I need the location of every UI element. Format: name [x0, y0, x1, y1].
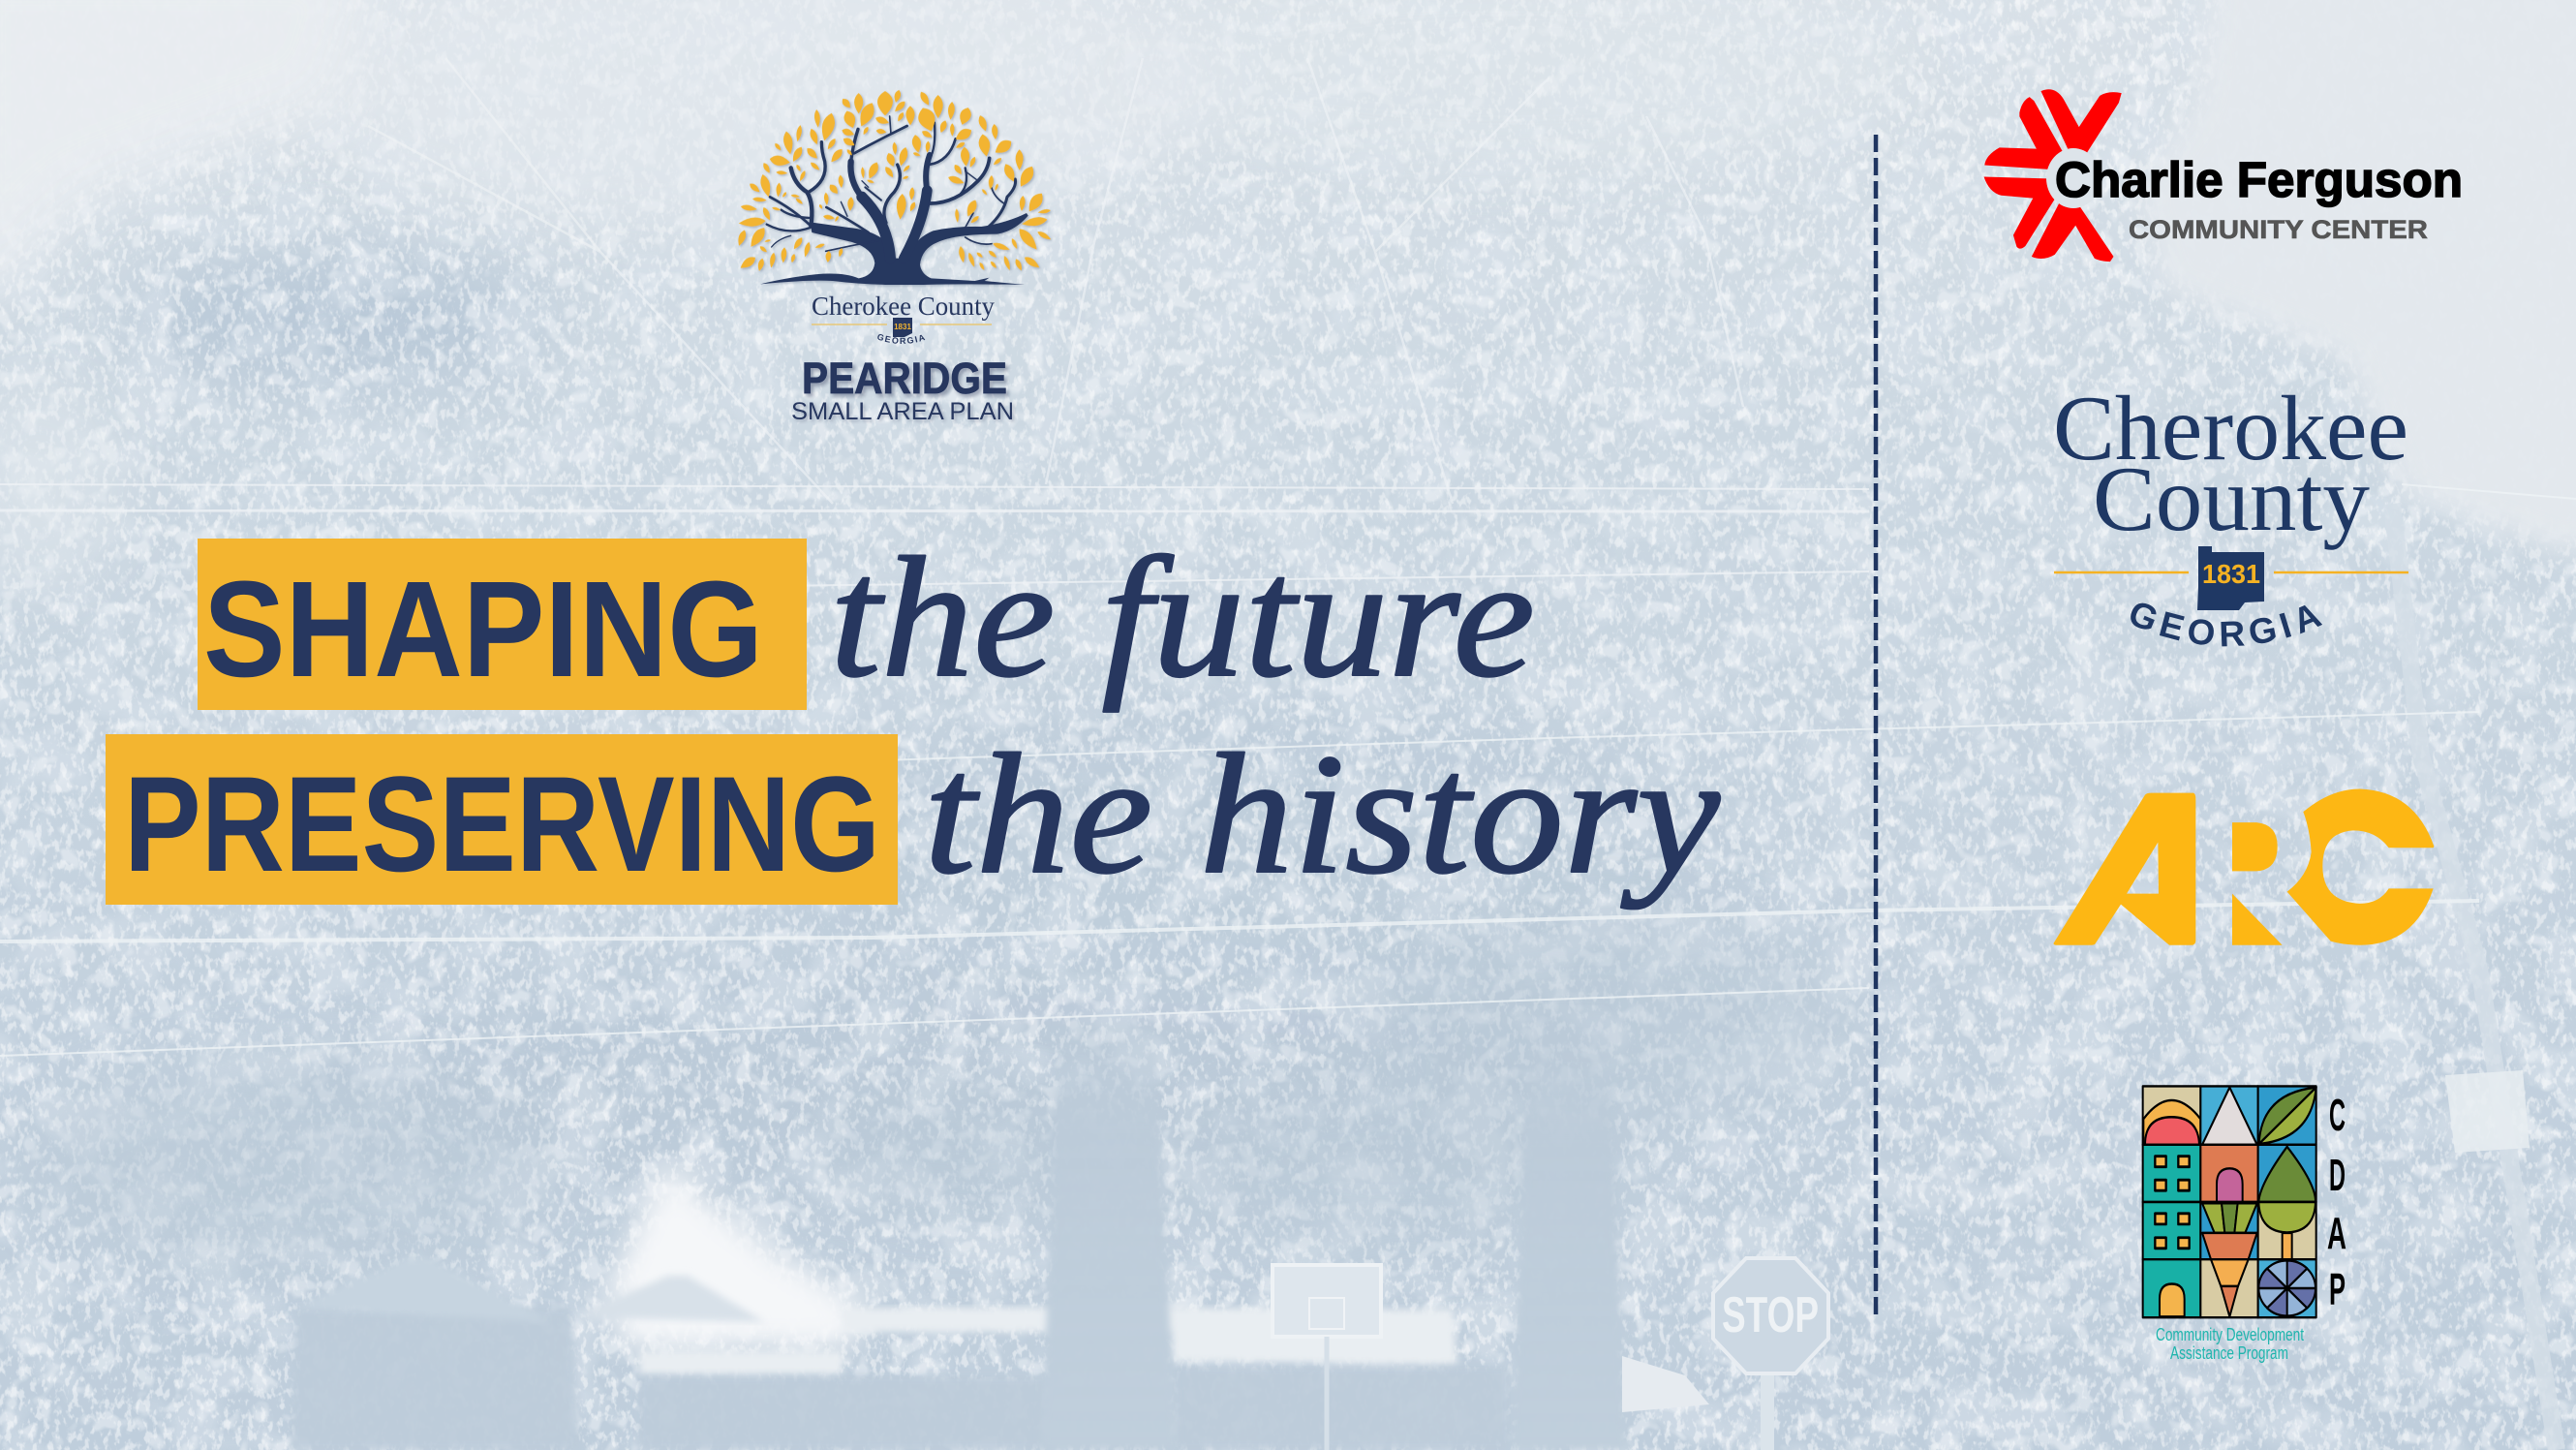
- heading word: PRESERVING: PRESERVING: [124, 748, 880, 900]
- letters C D A P: A: [2327, 1208, 2346, 1258]
- tree trunks: [1041, 988, 1627, 1450]
- caption: Community Development: Community Development: [2156, 1325, 2304, 1344]
- basketball backboard: [1273, 1265, 1381, 1450]
- highlight box: PRESERVING: [106, 734, 898, 905]
- letters C D A P: P: [2329, 1264, 2346, 1314]
- script heading: the history: the history: [924, 718, 1721, 910]
- letter R: [2232, 822, 2283, 945]
- icon: red star arrows: [1984, 89, 2122, 262]
- gold rules: [2054, 571, 2408, 573]
- script heading: the future: the future: [830, 521, 1535, 713]
- logo: Cherokee County Georgia: [2053, 377, 2408, 647]
- bright sky gap: [610, 1167, 857, 1346]
- awning: [1622, 1356, 1709, 1412]
- letters C D A P: [2327, 1090, 2346, 1314]
- darker foliage masses: [29, 910, 1850, 1269]
- icon: county outline with 1831: 1831: [2202, 559, 2260, 589]
- utility wires: [0, 484, 2576, 1056]
- sky areas: [0, 0, 387, 310]
- logo: ARC: [2054, 788, 2434, 945]
- logo wordmark: Cherokee County: Cherokee County: [812, 292, 995, 321]
- wordmark: Charlie Ferguson: Charlie Ferguson: [2055, 152, 2463, 207]
- wordmark: COMMUNITY CENTER: COMMUNITY CENTER: [2129, 215, 2428, 244]
- headline line 2: PRESERVING the history: [106, 718, 1721, 910]
- caption: Assistance Program: Assistance Program: [2170, 1343, 2288, 1363]
- logo: SMALL AREA PLAN: SMALL AREA PLAN: [791, 398, 1014, 425]
- utility pole: [2392, 504, 2557, 1450]
- headline line 1: SHAPING the future: [198, 521, 1535, 713]
- stop sign: STOP: [1722, 1287, 1819, 1343]
- halo ring behind the C: [2046, 148, 2101, 208]
- icon: county outline with 1831: [2197, 546, 2264, 610]
- icon: CDAP mosaic grid: [2143, 1086, 2316, 1317]
- light upper canopy haze: [0, 0, 1917, 591]
- logo: PEARIDGE: PEARIDGE: [802, 354, 1007, 403]
- heading word: SHAPING: SHAPING: [203, 552, 763, 705]
- highlight box: SHAPING: [198, 539, 807, 710]
- logo seal: rule, county shape and 1831: [812, 318, 992, 337]
- gazebo roofs: [293, 1259, 765, 1322]
- logo: GEORGIA: GEORGIA: [877, 334, 926, 344]
- wordmark: Cherokee: Cherokee: [2053, 377, 2408, 479]
- white roof: [639, 1308, 1457, 1375]
- logo: Cherokee County Pearidge Small Area Plan: [738, 89, 1053, 425]
- wordmark: GEORGIA on an arc: GEORGIA: [2131, 602, 2322, 647]
- letters C D A P: C: [2329, 1090, 2346, 1140]
- buildings: [291, 1308, 1511, 1450]
- letter A: [2054, 793, 2195, 945]
- letters C D A P: D: [2329, 1150, 2346, 1200]
- letter C: [2287, 788, 2434, 945]
- dashed vertical divider: [1874, 135, 1878, 1314]
- stop sign: [1713, 1258, 1828, 1450]
- icon: tree with golden leaves: [736, 89, 1052, 285]
- logo seal: rule, county shape and 1831: 1831: [894, 323, 911, 331]
- logo: CDAP Community Development Assistance Program: [2143, 1086, 2346, 1363]
- wordmark: County: County: [2093, 447, 2371, 550]
- logo: Charlie Ferguson Community Center: [1984, 89, 2463, 262]
- bare branches in the upper canopy: [368, 58, 1743, 504]
